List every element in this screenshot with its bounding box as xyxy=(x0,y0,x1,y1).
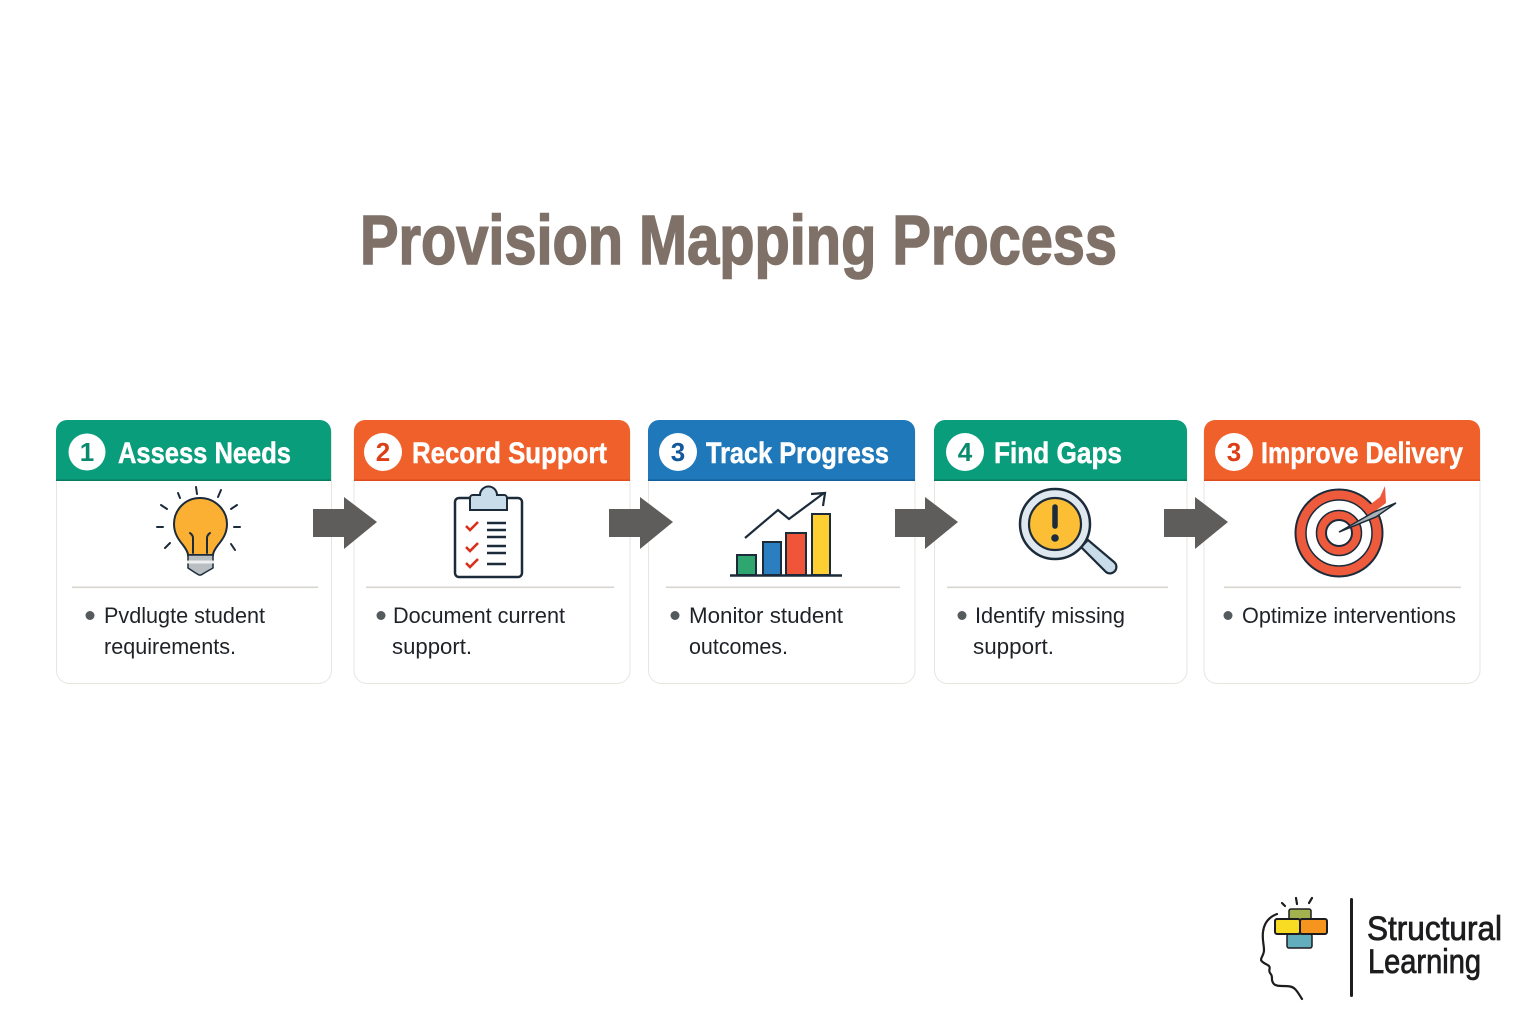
text: logo wordmark xyxy=(1367,910,1502,981)
arrow: step 2 to 3 xyxy=(609,497,673,549)
icon: head with blocks xyxy=(1261,898,1327,999)
header: step 3: 3 xyxy=(671,437,685,467)
header: step 4: 4 xyxy=(958,437,973,467)
header: step 5: Improve Delivery xyxy=(1261,437,1463,470)
text: step 4 bullet: Identify missing xyxy=(975,603,1125,628)
text: step 1 bullet: requirements. xyxy=(104,634,236,659)
header: step 3: Track Progress xyxy=(706,437,889,470)
header: step 5: 3 xyxy=(1227,437,1241,467)
text: step 4 bullet: support. xyxy=(973,634,1054,659)
arrow: step 3 to 4 xyxy=(895,497,958,549)
text: step 2 bullet: support. xyxy=(392,634,472,659)
icon: clipboard checklist xyxy=(455,486,522,577)
icon: magnifier with warning xyxy=(1020,489,1116,573)
text: step 1 bullet: Pvdlugte student xyxy=(104,603,265,628)
header: step 2: 2 xyxy=(376,437,390,467)
title: Provision Mapping Process xyxy=(360,201,1117,279)
text: step 5 bullet: Optimize interventions xyxy=(1242,603,1456,628)
header: step 2: Record Support xyxy=(412,437,607,470)
header: step 2 xyxy=(354,420,630,481)
header: step 4 xyxy=(934,420,1187,481)
text: step 1 bullet xyxy=(86,603,265,659)
text: step 3 bullet xyxy=(670,603,843,659)
arrow: step 4 to 5 xyxy=(1164,497,1228,549)
header: step 1: 1 xyxy=(80,437,94,467)
text: step 3 bullet: Monitor student xyxy=(689,603,843,628)
icon: light bulb xyxy=(157,487,240,575)
panel: step 1 Assess Needs xyxy=(56,420,332,684)
text: logo wordmark: Learning xyxy=(1368,943,1481,981)
arrow: step 1 to 2 xyxy=(313,497,377,549)
header: step 3 xyxy=(648,420,915,481)
text: step 3 bullet: outcomes. xyxy=(689,634,788,659)
header: step 1: Assess Needs xyxy=(118,437,291,470)
header: step 1 xyxy=(56,420,331,481)
icon: target with dart xyxy=(1296,486,1396,576)
panel: step 3 Track Progress xyxy=(648,420,915,684)
header: step 5 xyxy=(1204,420,1480,481)
icon: rising bar chart xyxy=(730,493,842,576)
logo: Structural Learning xyxy=(1261,898,1502,999)
text: logo wordmark: Structural xyxy=(1367,910,1502,948)
text: step 2 bullet xyxy=(376,603,565,659)
panel: step 4 Find Gaps xyxy=(934,420,1187,684)
text: step 4 bullet xyxy=(958,603,1125,659)
text: step 2 bullet: Document current xyxy=(393,603,565,628)
header: step 4: Find Gaps xyxy=(994,437,1122,470)
panel: step 5 Improve Delivery xyxy=(1204,420,1480,684)
panel: step 2 Record Support xyxy=(354,420,630,684)
